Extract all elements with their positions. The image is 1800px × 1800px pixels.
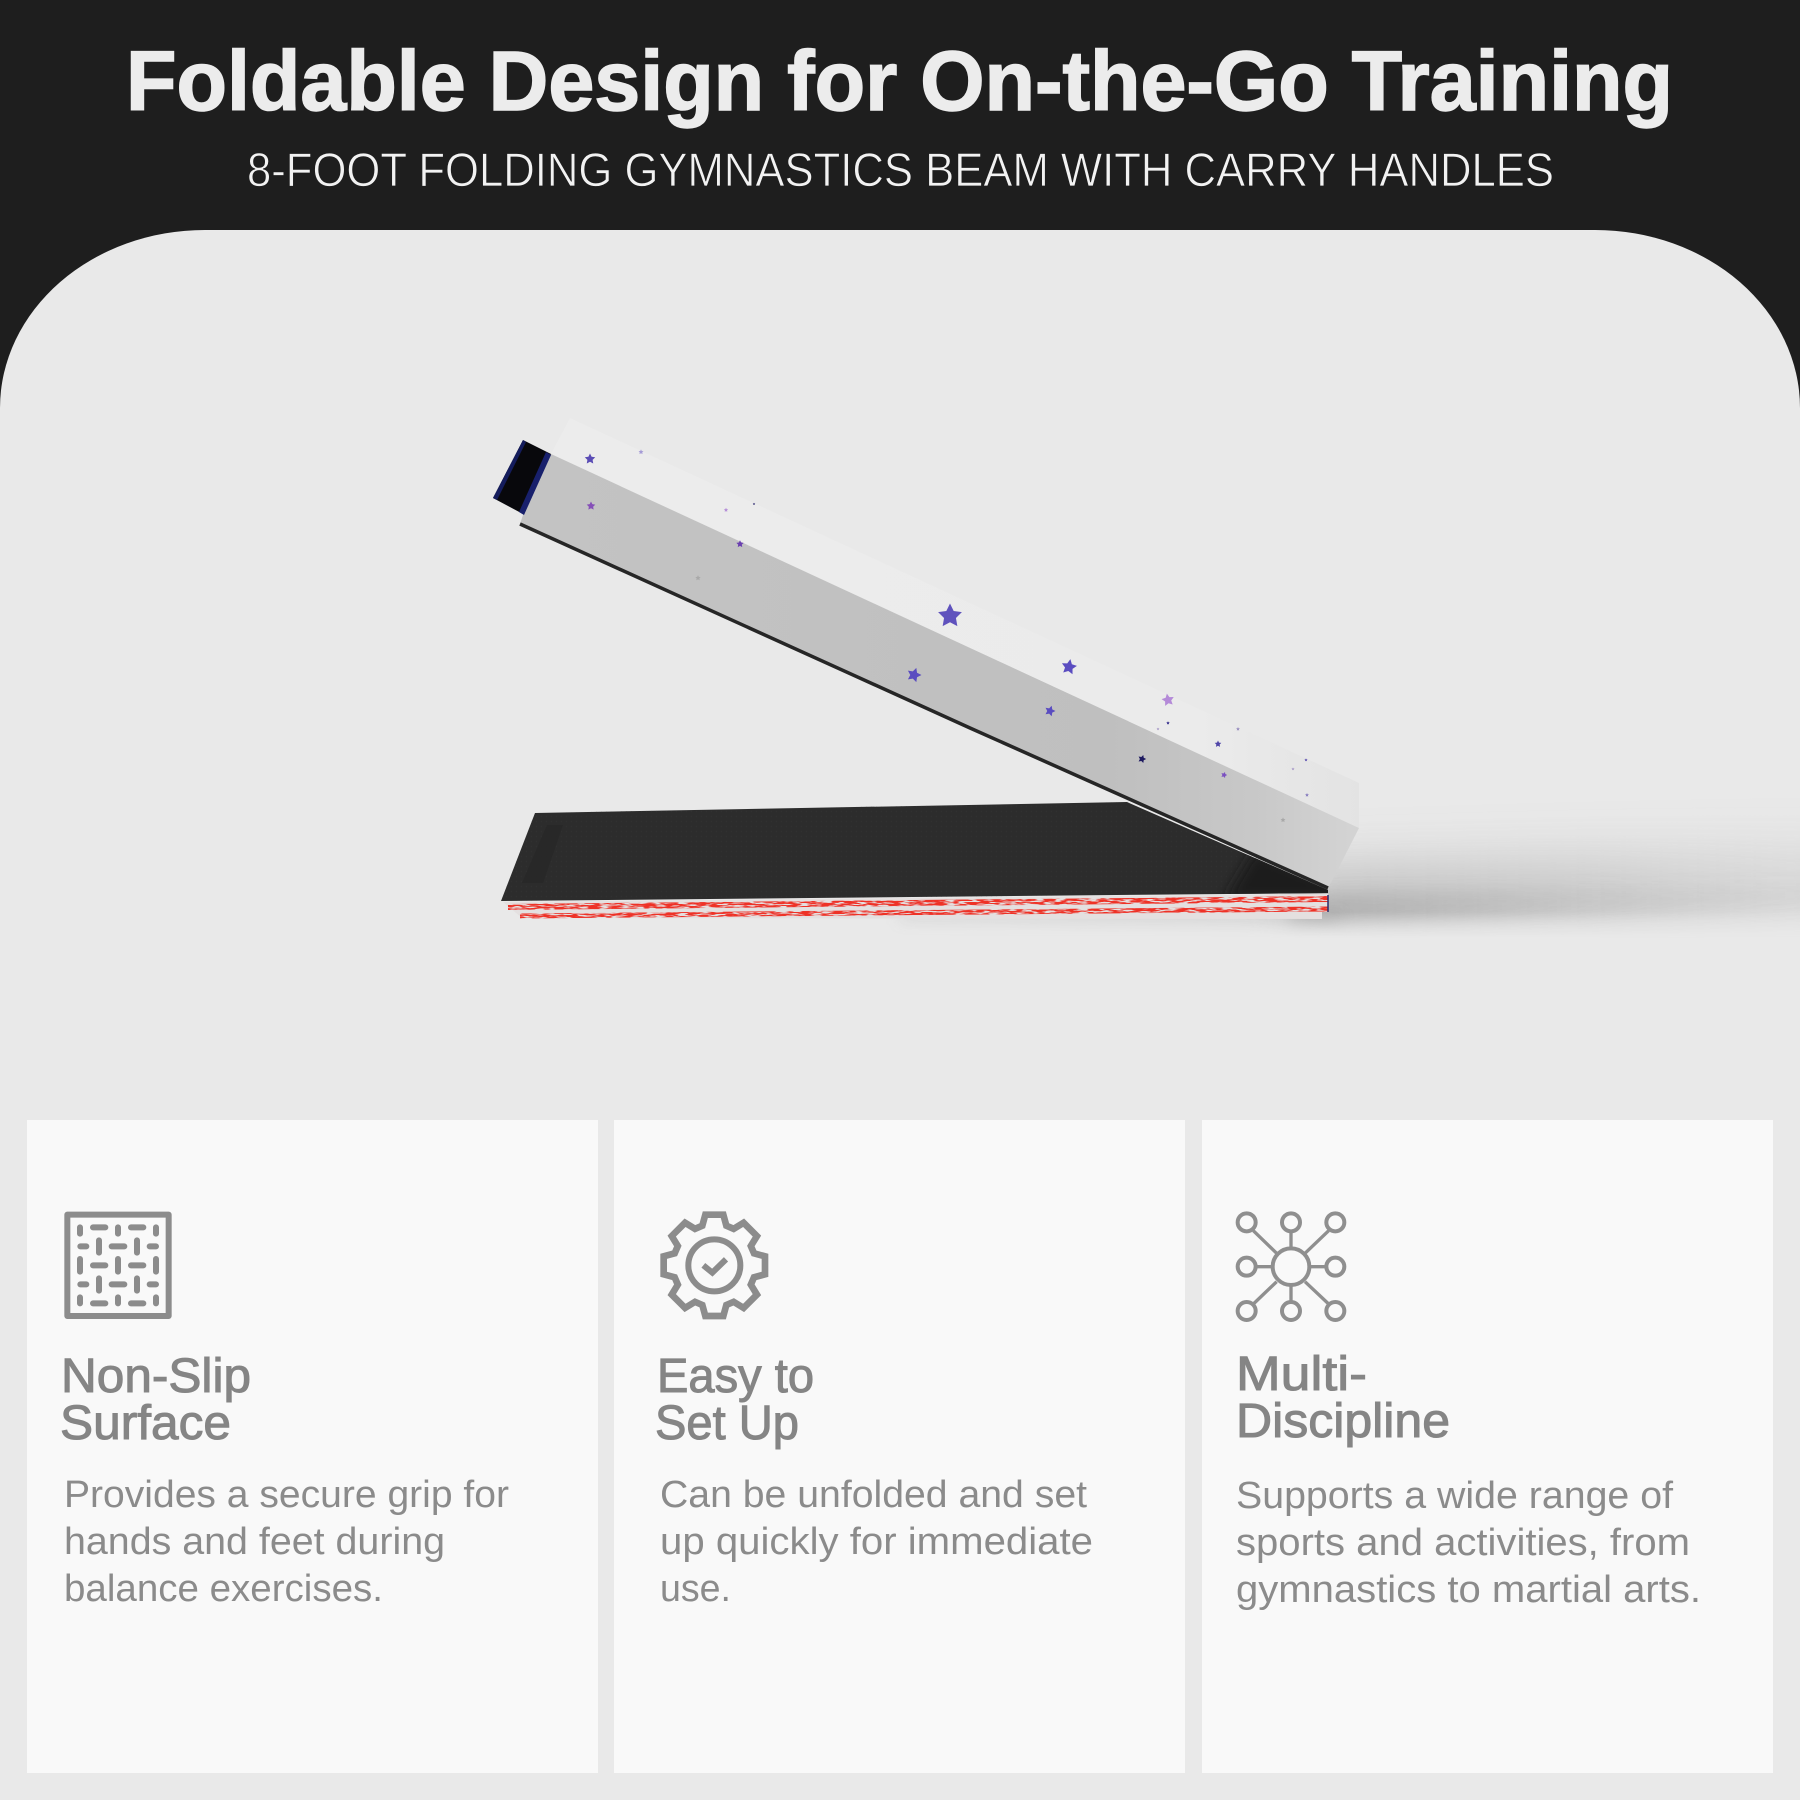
heading: non-slip surface: Surface <box>60 1397 231 1450</box>
heading: multi-discipline: Discipline <box>1236 1395 1450 1448</box>
upper beam section: pale top face <box>551 418 1359 828</box>
panel: non-slip surface <box>27 1120 598 1773</box>
upper beam section: gray side face <box>520 454 1359 888</box>
lower beam section: layered side with red stripes <box>503 894 1328 919</box>
icon: connected network nodes <box>1238 1213 1344 1320</box>
title: Foldable Design for On-the-Go Training <box>126 34 1673 128</box>
upper beam section: black underside edge <box>520 524 1328 888</box>
text: non-slip description <box>64 1474 509 1610</box>
subtitle: 8-FOOT FOLDING GYMNASTICS BEAM WITH CARRY HANDLES <box>247 143 1554 196</box>
icon: gear with check mark <box>664 1215 765 1316</box>
text: multi-discipline description: sports and activities, from <box>1236 1522 1690 1564</box>
text: non-slip description: hands and feet during <box>64 1521 445 1563</box>
text: non-slip description: balance exercises. <box>64 1568 383 1610</box>
heading: easy to set up: Set Up <box>655 1397 799 1450</box>
heading: easy to set up <box>655 1350 814 1450</box>
header background <box>0 0 1800 420</box>
text: multi-discipline description: Supports a wide range of <box>1236 1475 1673 1517</box>
heading: non-slip surface <box>60 1350 251 1450</box>
text: easy set up description: up quickly for immediate <box>660 1521 1093 1563</box>
product: folding gymnastics beam <box>493 418 1359 919</box>
panel: easy to set up <box>614 1120 1185 1773</box>
heading: multi-discipline <box>1236 1348 1450 1448</box>
heading: non-slip surface: Non-Slip <box>61 1350 251 1403</box>
icon: textured grip maze <box>67 1215 169 1316</box>
beam end: black cap with blue edge <box>493 440 551 515</box>
floor shadow <box>900 850 1800 935</box>
text: multi-discipline description <box>1236 1475 1701 1611</box>
text: easy set up description: use. <box>660 1568 731 1610</box>
star pattern <box>585 449 1309 822</box>
heading: easy to set up: Easy to <box>657 1350 814 1403</box>
heading: multi-discipline: Multi- <box>1236 1348 1367 1401</box>
panel: multi-discipline <box>1202 1120 1773 1773</box>
text: easy set up description: Can be unfolded and set <box>660 1474 1087 1516</box>
lower beam section: dark surface <box>501 802 1340 901</box>
text: easy set up description <box>660 1474 1093 1610</box>
text: multi-discipline description: gymnastics to martial arts. <box>1236 1569 1701 1611</box>
text: non-slip description: Provides a secure grip for <box>64 1474 509 1516</box>
